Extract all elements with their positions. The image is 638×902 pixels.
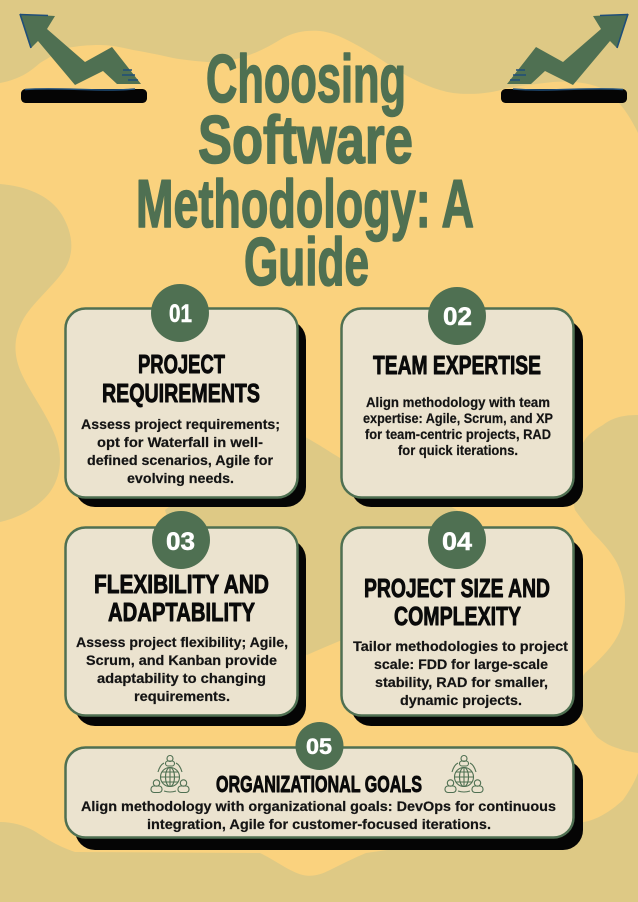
number badge 02 [428,287,486,345]
number badge 01: 01 [169,300,192,328]
text: project size description: scale: FDD for large-scale [374,657,549,672]
number badge 04 [428,511,486,569]
heading: project requirements: PROJECT [138,349,225,379]
text: flexibility description: adaptability to changing [97,671,266,686]
text: project requirements description: Assess project requirements; [81,417,280,432]
heading: project size and complexity: COMPLEXITY [394,601,521,631]
text: project requirements description: evolving needs. [127,471,234,486]
text: project size description: stability, RAD for smaller, [375,675,548,690]
number badge 03: 03 [166,528,195,556]
panel: project requirements [66,284,306,507]
text: project size description [353,639,569,708]
heading: project size and complexity [364,573,550,631]
heading: project requirements [102,349,260,408]
number badge 03 [152,511,210,569]
icon: globe with people, left [151,756,189,792]
text: project requirements description: opt for Waterfall in well- [97,435,263,450]
text: team expertise description [363,395,553,458]
number badge 04: 04 [442,528,472,556]
text: team expertise description: expertise: Agile, Scrum, and XP [363,411,553,426]
panel: organizational goals [66,722,583,850]
title [136,41,474,300]
heading: project requirements: REQUIREMENTS [102,378,260,408]
panel: flexibility and adaptability [66,511,306,726]
heading: flexibility and adaptability: ADAPTABILITY [108,597,255,627]
text: flexibility description: requirements. [134,689,230,704]
heading: flexibility and adaptability [94,569,269,627]
heading: organizational goals: ORGANIZATIONAL GOALS [216,771,422,797]
title: Choosing [206,41,406,117]
icon: right zigzag arrow [501,14,628,103]
text: project size description: Tailor methodologies to project [353,639,569,654]
text: flexibility description [76,635,288,704]
text: team expertise description: for quick iterations. [398,443,518,458]
text: organizational goals description: integration, Agile for customer-focused iterations. [147,817,491,832]
number badge 05 [296,722,344,770]
heading: flexibility and adaptability: FLEXIBILITY AND [94,569,269,599]
text: team expertise description: Align methodology with team [366,395,550,410]
icon: globe with people, right [445,756,483,792]
text: project requirements description [81,417,280,486]
title: Software [198,102,413,178]
text: project size description: dynamic projects. [400,693,522,708]
text: organizational goals description: Align methodology with organizational goals: DevOps for continuous [81,799,556,814]
number badge 05: 05 [306,734,332,759]
icon: left zigzag arrow [20,14,147,103]
panel: project size and complexity [342,511,583,726]
text: project requirements description: defined scenarios, Agile for [87,453,274,468]
text: flexibility description: Scrum, and Kanban provide [86,653,278,668]
title: Guide [244,224,369,300]
heading: team expertise: TEAM EXPERTISE [373,350,541,380]
text: flexibility description: Assess project flexibility; Agile, [76,635,288,650]
title: Methodology: A [136,166,474,242]
text: team expertise description: for team-centric projects, RAD [365,427,551,442]
number badge 02: 02 [443,303,472,331]
heading: project size and complexity: PROJECT SIZE AND [364,573,550,603]
number badge 01 [151,284,209,342]
text: organizational goals description [81,799,556,832]
panel: team expertise [342,287,583,507]
